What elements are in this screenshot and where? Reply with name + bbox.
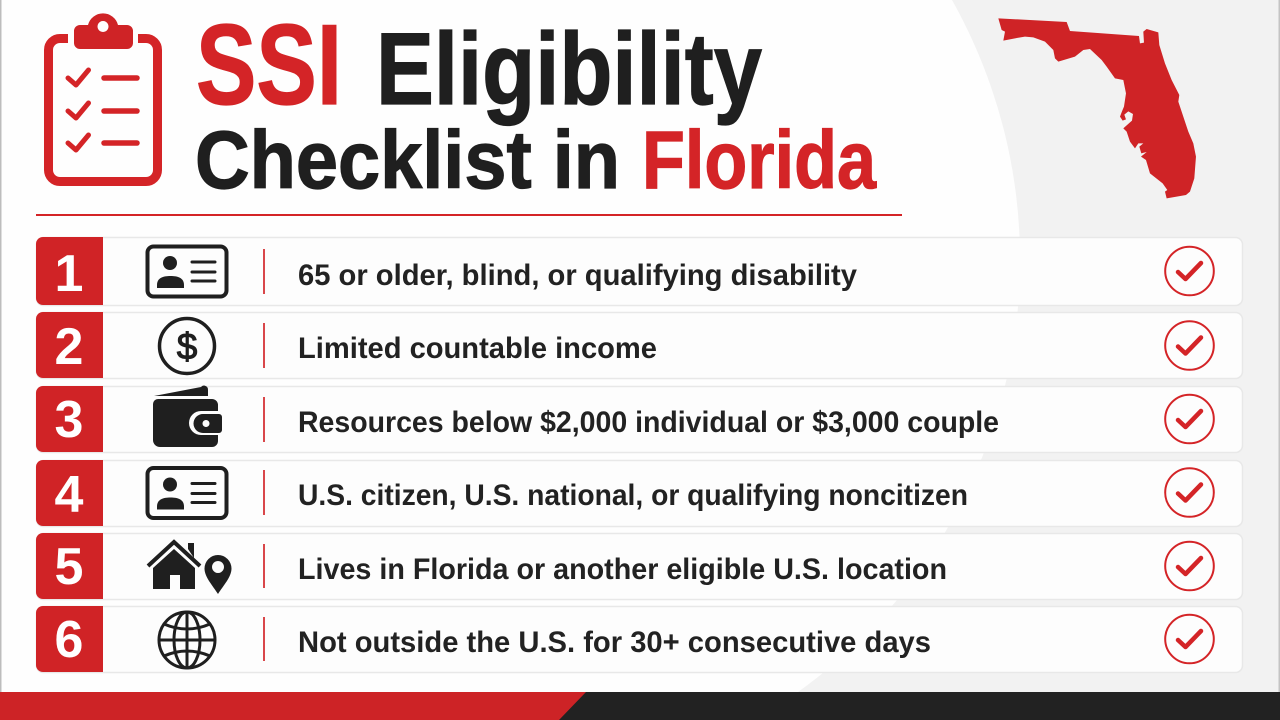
icon: check circle	[1165, 321, 1214, 370]
icon: house and location pin	[148, 542, 232, 594]
row 1: 1	[55, 245, 83, 303]
map: Florida silhouette	[998, 18, 1196, 198]
row 6: Not outside the U.S. for 30+ consecutive days	[298, 626, 931, 659]
row 5: Lives in Florida or another eligible U.S. location	[298, 553, 947, 586]
row 2: 2	[55, 318, 83, 376]
row 4: U.S. citizen, U.S. national, or qualifying noncitizen	[298, 479, 968, 512]
row 5: 5	[55, 538, 83, 596]
icon: clipboard checklist	[48, 13, 158, 182]
icon: dollar coin	[160, 318, 214, 374]
row 6	[36, 606, 1242, 672]
icon: check circle	[1165, 615, 1214, 663]
row 1	[36, 237, 1242, 306]
row 3: 3	[55, 391, 83, 449]
icon: wallet	[153, 386, 222, 447]
row 2: Limited countable income	[298, 332, 657, 365]
icon: globe	[159, 612, 215, 668]
row 3	[36, 386, 1242, 452]
icon: check circle	[1165, 468, 1214, 517]
icon: ID card	[148, 468, 226, 518]
icon: ID card	[148, 246, 226, 296]
icon: check circle	[1165, 247, 1214, 295]
title: Florida	[642, 115, 877, 206]
row 2	[36, 312, 1242, 378]
icon: check circle	[1165, 395, 1214, 443]
row 4	[36, 460, 1242, 526]
row 5	[36, 533, 1242, 600]
icon: check circle	[1165, 542, 1214, 590]
title: Eligibility	[376, 12, 762, 126]
icon: dollar coin: $	[177, 326, 197, 367]
title	[195, 2, 877, 206]
row 6: 6	[55, 611, 83, 669]
heading divider	[36, 214, 902, 216]
title: Checklist in	[195, 115, 620, 206]
row 3: Resources below $2,000 individual or $3,000 couple	[298, 406, 999, 439]
row 1: 65 or older, blind, or qualifying disability	[298, 259, 857, 292]
footer band	[0, 692, 1280, 720]
title: SSI	[196, 2, 342, 129]
row 4: 4	[55, 466, 84, 524]
